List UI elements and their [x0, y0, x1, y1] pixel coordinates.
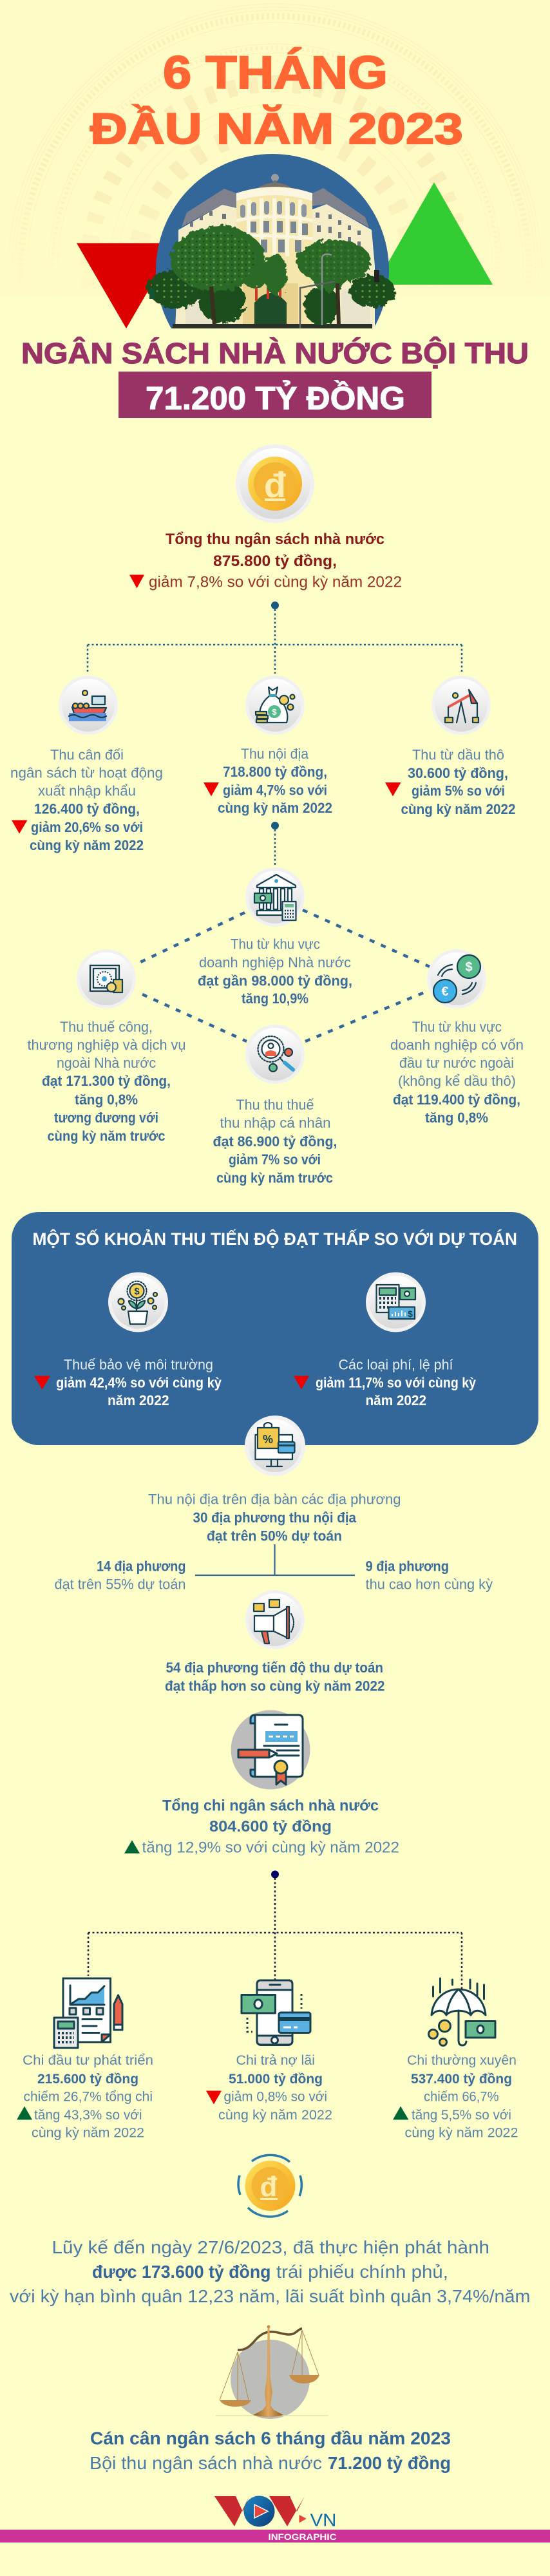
icon: calculator and cash: $	[408, 1309, 413, 1319]
red down marker	[34, 1376, 50, 1390]
red down marker	[294, 1376, 309, 1390]
text: personal income tax: đạt 86.900 tỷ đồng,	[213, 1133, 337, 1150]
icon: currency exchange: $	[465, 960, 473, 974]
logo: VOV.VN infographic: INFOGRAPHIC	[268, 2532, 336, 2542]
text: state enterprises: doanh nghiệp Nhà nước	[199, 954, 351, 971]
total revenue text	[129, 531, 402, 591]
icon: currency exchange	[427, 949, 486, 1009]
text: environmental protection tax: năm 2022	[108, 1392, 169, 1408]
text: government bonds: được 173.600 tỷ đồng	[92, 2262, 270, 2282]
text: foreign invested sector: doanh nghiệp có vốn	[390, 1037, 524, 1053]
text: 54 localities	[165, 1660, 385, 1694]
text: foreign invested sector	[390, 1019, 524, 1126]
title: 6 tháng đầu năm 2023: ĐẦU NĂM 2023	[90, 104, 463, 153]
text: development investment: cùng kỳ năm 2022	[32, 2125, 144, 2141]
icon: umbrella with coins	[429, 1978, 495, 2045]
headline value box: 71.200 tỷ đồng: 71.200 TỶ ĐỒNG	[146, 380, 405, 416]
red down marker	[206, 2090, 222, 2105]
connector: dashed diamond	[140, 910, 430, 1041]
text: development investment: Chi đầu tư phát triển	[23, 2053, 153, 2068]
text: local revenue intro	[148, 1492, 401, 1544]
text: fees and charges: năm 2022	[366, 1392, 426, 1408]
text: crude oil revenue: Thu từ dầu thô	[412, 747, 504, 762]
icon: calculator and cash	[366, 1273, 426, 1332]
text: domestic revenue: giảm 4,7% so với	[223, 782, 327, 799]
icon: oil pump	[431, 676, 491, 735]
text: non-state sector	[27, 1019, 185, 1144]
text: domestic revenue: 718.800 tỷ đồng,	[223, 764, 327, 780]
text: fees and charges	[294, 1356, 477, 1408]
connector: revenue tree	[88, 601, 462, 865]
icon: signed document	[231, 1710, 310, 1789]
panel heading: MỘT SỐ KHOẢN THU TIẾN ĐỘ ĐẠT THẤP SO VỚI DỰ TOÁN	[32, 1228, 517, 1249]
icon: currency exchange: €	[441, 985, 449, 999]
red down marker	[129, 574, 144, 589]
text: foreign invested sector: (không kể dầu thô)	[398, 1073, 516, 1089]
text: state enterprises	[198, 936, 352, 1007]
text: foreign invested sector: đạt 119.400 tỷ đồng,	[393, 1092, 520, 1108]
text: local revenue intro: 30 địa phương thu nội địa	[193, 1510, 357, 1526]
background emblem: bronze drum pattern	[15, 4, 533, 230]
text: non-state sector: tăng 0,8%	[75, 1092, 138, 1108]
text: government bonds: với kỳ hạn bình quân 12,23 năm, lãi suất bình quân 3,74%/năm	[10, 2286, 530, 2306]
icon: money bag	[245, 676, 305, 735]
text: personal income tax: Thu thu thuế	[236, 1097, 314, 1113]
text: development investment: 215.600 tỷ đồng	[37, 2072, 138, 2087]
total expenditure text: tăng 12,9% so với cùng kỳ năm 2022	[142, 1839, 399, 1856]
text: non-state sector: đạt 171.300 tỷ đồng,	[42, 1073, 171, 1089]
text: fees and charges: giảm 11,7% so với cùng kỳ	[316, 1374, 477, 1391]
text: government bonds	[10, 2237, 530, 2306]
text: personal income tax: thu nhập cá nhân	[220, 1115, 331, 1131]
text: 14 localities	[54, 1558, 185, 1592]
text: interest payments: giảm 0,8% so với	[224, 2089, 327, 2105]
icon: money bag: $	[272, 707, 277, 717]
icon: coin with circulating arrows: đ	[260, 2171, 278, 2202]
text: non-state sector: Thu thuế công,	[60, 1019, 153, 1035]
text: personal income tax: giảm 7% so với	[229, 1151, 321, 1168]
total revenue text: Tổng thu ngân sách nhà nước	[166, 531, 384, 548]
text: interest payments: 51.000 tỷ đồng	[229, 2072, 323, 2087]
text: domestic revenue	[204, 746, 332, 816]
icon: balance scale	[216, 2325, 328, 2419]
text: budget balance: Cán cân ngân sách 6 tháng đầu năm 2023	[90, 2428, 451, 2448]
icon: cargo ship	[59, 676, 118, 735]
text: export-import revenue: xuất nhập khẩu	[38, 783, 136, 799]
text: development investment: chiếm 26,7% tổng chi	[23, 2089, 153, 2105]
icon: gold dong coin: đ	[264, 464, 286, 505]
text: development investment	[17, 2053, 153, 2141]
text: interest payments: cùng kỳ năm 2022	[218, 2108, 332, 2123]
text: 9 localities: thu cao hơn cùng kỳ	[366, 1577, 493, 1592]
text: export-import revenue	[10, 747, 163, 853]
green up marker	[124, 1841, 140, 1853]
logo: VOV.VN infographic	[214, 2496, 336, 2542]
red down marker	[12, 820, 27, 833]
text: 54 localities: 54 địa phương tiến độ thu dự toán	[166, 1660, 383, 1676]
title: 6 tháng đầu năm 2023: 6 THÁNG	[163, 48, 388, 99]
connector: T split	[195, 1544, 355, 1575]
total revenue text: giảm 7,8% so với cùng kỳ năm 2022	[149, 573, 402, 591]
text: foreign invested sector: đầu tư nước ngoài	[399, 1055, 514, 1071]
text: export-import revenue: Thu cân đối	[50, 747, 124, 762]
icon: plant with coin	[108, 1273, 168, 1332]
red down marker	[385, 782, 401, 796]
text: recurrent expenditure: chiếm 66,7%	[424, 2089, 498, 2105]
text: recurrent expenditure: Chi thường xuyên	[407, 2053, 517, 2068]
connector: expenditure tree	[88, 1870, 462, 1994]
text: crude oil revenue: 30.600 tỷ đồng,	[408, 765, 508, 781]
icon: online shopping: %	[263, 1433, 273, 1446]
text: export-import revenue: ngân sách từ hoạt động	[10, 765, 163, 781]
text: non-state sector: tương đương với	[54, 1110, 158, 1126]
text: crude oil revenue: giảm 5% so với	[412, 783, 505, 799]
icon: coin with circulating arrows	[238, 2155, 301, 2217]
icon: phone with cash and card	[242, 1980, 310, 2045]
text: recurrent expenditure: 537.400 tỷ đồng	[411, 2072, 512, 2087]
text: 14 localities: 14 địa phương	[97, 1558, 185, 1574]
text: non-state sector: thương nghiệp và dịch vụ	[27, 1037, 185, 1053]
text: 54 localities: đạt thấp hơn so cùng kỳ năm 2022	[165, 1678, 385, 1694]
text: interest payments	[206, 2053, 332, 2123]
text: crude oil revenue	[385, 747, 515, 817]
text: state enterprises: Thu từ khu vực	[231, 936, 320, 952]
text: local revenue intro: Thu nội địa trên địa bàn các địa phương	[148, 1492, 401, 1507]
text: foreign invested sector: Thu từ khu vực	[412, 1019, 502, 1035]
text: state enterprises: đạt gần 98.000 tỷ đồng,	[198, 972, 352, 989]
total expenditure text: Tổng chi ngân sách nhà nước	[162, 1797, 379, 1815]
text: export-import revenue: giảm 20,6% so với	[31, 819, 143, 835]
total expenditure text: 804.600 tỷ đồng	[209, 1818, 332, 1835]
text: 9 localities	[366, 1558, 493, 1592]
text: export-import revenue: cùng kỳ năm 2022	[30, 837, 144, 853]
text: 9 localities: 9 địa phương	[366, 1558, 449, 1574]
panel: low-progress revenues	[12, 1212, 538, 1445]
text: recurrent expenditure: cùng kỳ năm 2022	[404, 2125, 518, 2141]
text: environmental protection tax: Thuế bảo vệ môi trường	[64, 1356, 213, 1373]
icon: online shopping	[245, 1416, 305, 1476]
headline value box: 71.200 tỷ đồng	[119, 372, 431, 418]
text: 14 localities: đạt trên 55% dự toán	[54, 1577, 185, 1592]
text: environmental protection tax	[34, 1356, 222, 1408]
red down marker	[204, 782, 219, 796]
photo: Ministry of Finance building in blue circle	[146, 154, 397, 328]
icon: megaphone	[245, 1590, 305, 1649]
footer bar	[0, 2530, 550, 2543]
text: budget balance	[90, 2428, 451, 2473]
text: government bonds: trái phiếu chính phủ,	[276, 2262, 448, 2282]
text: government bonds: Lũy kế đến ngày 27/6/2023, đã thực hiện phát hành	[52, 2237, 489, 2257]
icon: magnifier on person	[245, 1025, 305, 1084]
green up triangle	[375, 182, 493, 285]
icon: safe with coins	[77, 949, 136, 1009]
green up marker	[393, 2106, 408, 2120]
total revenue text: 875.800 tỷ đồng,	[213, 553, 337, 570]
icon: development investment report	[54, 1978, 122, 2048]
icon: gold dong coin	[236, 444, 314, 523]
headline: ngân sách nhà nước bội thu: NGÂN SÁCH NHÀ NƯỚC BỘI THU	[21, 337, 529, 370]
text: state enterprises: tăng 10,9%	[242, 990, 308, 1007]
logo: VOV.VN infographic: VN	[310, 2510, 336, 2530]
text: recurrent expenditure	[393, 2053, 518, 2141]
text: budget balance: 71.200 tỷ đồng	[328, 2453, 451, 2473]
text: crude oil revenue: cùng kỳ năm 2022	[401, 801, 515, 817]
text: export-import revenue: 126.400 tỷ đồng,	[34, 801, 140, 817]
text: local revenue intro: đạt trên 50% dự toán	[207, 1528, 342, 1544]
text: fees and charges: Các loại phí, lệ phí	[339, 1356, 453, 1373]
text: non-state sector: ngoài Nhà nước	[57, 1055, 156, 1071]
text: non-state sector: cùng kỳ năm trước	[48, 1128, 165, 1144]
text: environmental protection tax: giảm 42,4% so với cùng kỳ	[56, 1374, 222, 1391]
text: interest payments: Chi trả nợ lãi	[236, 2053, 315, 2068]
icon: bank	[245, 867, 305, 927]
green up marker	[17, 2106, 32, 2120]
red down triangle	[77, 243, 176, 328]
title: 6 tháng đầu năm 2023	[90, 48, 463, 153]
total expenditure text	[124, 1797, 399, 1856]
text: domestic revenue: cùng kỳ năm 2022	[218, 800, 332, 816]
text: personal income tax	[213, 1097, 337, 1186]
text: foreign invested sector: tăng 0,8%	[425, 1110, 488, 1126]
text: budget balance: Bội thu ngân sách nhà nước	[90, 2453, 322, 2473]
text: recurrent expenditure: tăng 5,5% so với	[412, 2108, 511, 2123]
text: domestic revenue: Thu nội địa	[241, 746, 309, 762]
icon: plant with coin: $	[134, 1286, 140, 1297]
text: personal income tax: cùng kỳ năm trước	[216, 1170, 333, 1186]
text: development investment: tăng 43,3% so với	[34, 2108, 142, 2123]
